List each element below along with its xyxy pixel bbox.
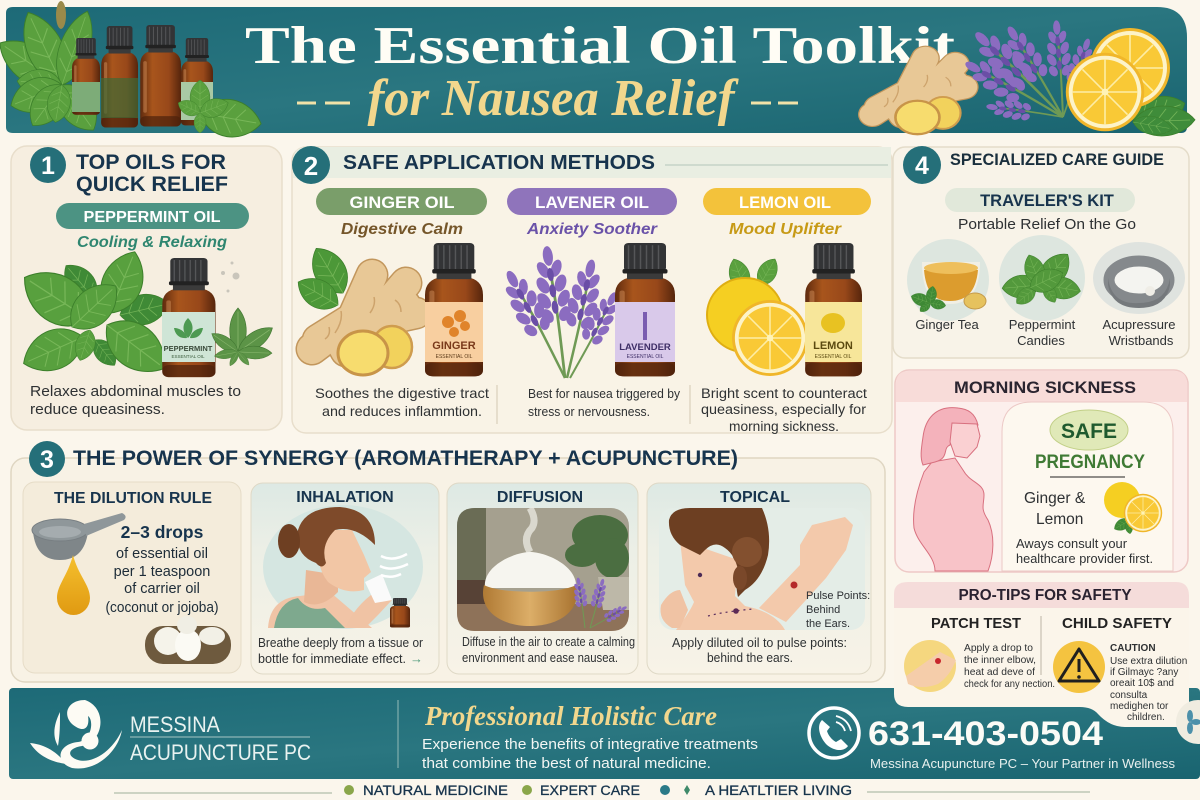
- text: CAUTION: [1110, 643, 1156, 654]
- tagline: Cooling & Relaxing: [77, 234, 227, 251]
- droplets: [221, 262, 240, 292]
- tag: a healthier living: A HEATLTIER LIVING: [705, 783, 852, 798]
- body text: [30, 384, 241, 418]
- card: topical: [647, 483, 871, 674]
- icon: oil drop: [57, 555, 90, 615]
- text: Use extra dilution: [1110, 656, 1187, 667]
- phone number: 631-403-0504: [868, 715, 1103, 753]
- pill: ginger: [316, 188, 487, 215]
- caption: Apply diluted oil to pulse points:: [672, 636, 847, 650]
- icon: measuring spoon: [32, 513, 126, 560]
- description: queasiness, especially for: [701, 402, 867, 417]
- tag: natural medicine: NATURAL MEDICINE: [363, 783, 508, 798]
- icon: lavender: [493, 244, 628, 386]
- callout: Pulse Points:: [806, 590, 870, 602]
- badge: safe: [1050, 410, 1128, 450]
- caption: [258, 636, 423, 666]
- description: [315, 385, 489, 419]
- care heading: Professional Holistic Care: [424, 701, 717, 731]
- icon: lemon bottle: [805, 243, 862, 376]
- text: [1110, 643, 1187, 723]
- item: acupressure wristbands: Wristbands: [1109, 333, 1174, 348]
- caption: Breathe deeply from a tissue or: [258, 636, 423, 650]
- badge: safe: SAFE: [1061, 420, 1117, 443]
- description: Bright scent to counteract: [701, 386, 867, 401]
- advisory: [1016, 536, 1153, 566]
- number badge 4: 4: [915, 152, 929, 180]
- caption: [462, 635, 635, 665]
- number badge 3: [29, 441, 65, 477]
- logo text: ACUPUNCTURE PC: [130, 740, 311, 765]
- icon: ginger bottle: GINGER: [432, 340, 476, 352]
- heading: TOP OILS FOR: [76, 151, 226, 174]
- caption: environment and ease nausea.: [462, 651, 618, 665]
- heading: PATCH TEST: [931, 615, 1021, 632]
- subtitle: for Nausea Relief: [368, 70, 739, 127]
- illustration: topical application: [659, 508, 865, 630]
- dosage text: of carrier oil: [124, 581, 200, 597]
- subheading: Portable Relief On the Go: [958, 217, 1136, 233]
- dosage text: 2–3 drops: [121, 522, 204, 542]
- dosage text: [106, 522, 218, 616]
- tag: a healthier living: [660, 783, 852, 798]
- heading: SPECIALIZED CARE GUIDE: [950, 151, 1164, 169]
- icon: essential oil bottles: [72, 25, 213, 127]
- panel: the power of synergy: [11, 441, 885, 682]
- footer band: [9, 688, 1200, 779]
- description: [528, 386, 680, 419]
- icon: phone: [809, 708, 859, 758]
- tagline: Digestive Calm: [341, 221, 463, 238]
- advisory: Aways consult your: [1016, 536, 1128, 551]
- column: patch test: [904, 615, 1055, 692]
- pill: peppermint oil: [56, 203, 249, 229]
- icon: lemon bottle: ESSENTIAL OIL: [815, 354, 852, 360]
- traveler's kit label: TRAVELER'S KIT: [980, 192, 1114, 210]
- body text: reduce queasiness.: [30, 402, 165, 418]
- panel: top oils for quick relief: [11, 146, 282, 430]
- icon: ginger: [291, 240, 416, 375]
- header banner: [0, 1, 1195, 142]
- advisory: healthcare provider first.: [1016, 551, 1153, 566]
- tagline: Mood Uplifter: [729, 221, 842, 238]
- pill: ginger: GINGER OIL: [350, 193, 454, 212]
- caption: Diffuse in the air to create a calming: [462, 635, 635, 649]
- logo text: MESSINA: [130, 712, 220, 737]
- body text: Relaxes abdominal muscles to: [30, 384, 241, 400]
- icon: warning: [1053, 641, 1105, 693]
- icon: coconut: [145, 616, 231, 664]
- heading: INHALATION: [296, 489, 394, 506]
- icon: peppermint bottle: ESSENTIAL OIL: [171, 354, 205, 359]
- number badge 4: [903, 146, 941, 184]
- tagline: Anxiety Soother: [526, 221, 658, 238]
- pill: lavender: [507, 188, 677, 215]
- logo text: [130, 712, 311, 765]
- card: diffusion: [447, 483, 638, 674]
- care text: Experience the benefits of integrative treatments: [422, 737, 758, 753]
- traveler's kit label: [945, 188, 1135, 212]
- icon: lavender bottle: [615, 243, 675, 376]
- icon: patch on arm: [904, 640, 956, 692]
- care text: [422, 737, 758, 772]
- heading: THE DILUTION RULE: [54, 490, 212, 507]
- text: the inner elbow,: [964, 654, 1036, 666]
- column: lavender oil: [493, 188, 680, 419]
- bottom tagline strip: [114, 783, 1090, 798]
- icon: lavender bottle: LAVENDER: [619, 342, 671, 353]
- logo mark: [30, 700, 122, 769]
- heading: CHILD SAFETY: [1062, 615, 1172, 632]
- card: inhalation: [251, 483, 439, 674]
- item: peppermint candies: Peppermint: [1009, 317, 1076, 332]
- text: if Gilmayc ?any: [1110, 667, 1178, 678]
- dosage text: of essential oil: [116, 546, 208, 562]
- pill: lavender: LAVENER OIL: [535, 193, 649, 212]
- text: oreait 10$ and: [1110, 678, 1174, 689]
- text: [964, 642, 1055, 690]
- pill: lemon: [703, 188, 871, 215]
- item: peppermint candies: [999, 235, 1085, 348]
- icon: lavender bottle: ESSENTIAL OIL: [627, 354, 664, 360]
- icon: peppermint bottle: PEPPERMINT: [164, 344, 213, 353]
- heading: PRO-TIPS FOR SAFETY: [958, 587, 1132, 604]
- description: [701, 386, 867, 434]
- heading: DIFFUSION: [497, 489, 583, 506]
- panel: safe application methods: [291, 146, 892, 434]
- description: Soothes the digestive tract: [315, 385, 489, 401]
- description: morning sickness.: [729, 419, 839, 434]
- text: medighen tor: [1110, 701, 1169, 712]
- icon: lemons: [707, 255, 808, 376]
- illustration: pregnant silhouette: [914, 408, 993, 571]
- icon: peppermint bottle: [162, 258, 216, 377]
- text: consulta: [1110, 690, 1148, 701]
- item: acupressure wristbands: Acupressure: [1103, 317, 1175, 332]
- dosage text: (coconut or jojoba): [106, 600, 218, 616]
- icon: ginger root header: [873, 58, 964, 134]
- caption: behind the ears.: [707, 651, 793, 665]
- caption: bottle for immediate effect.: [258, 652, 406, 666]
- text: ginger and lemon: Lemon: [1036, 511, 1083, 528]
- number badge 3: 3: [40, 446, 54, 474]
- text: children.: [1127, 712, 1165, 723]
- tag: expert care: EXPERT CARE: [540, 783, 640, 798]
- pill: lemon: LEMON OIL: [739, 193, 831, 212]
- text: ginger and lemon: [1024, 490, 1086, 528]
- heading: MORNING SICKNESS: [954, 378, 1136, 397]
- number badge 2: [292, 146, 330, 184]
- item: ginger tea: [907, 239, 989, 332]
- illustration: diffuser: [457, 508, 630, 633]
- callout: Behind: [806, 604, 840, 616]
- pill: peppermint oil: PEPPERMINT OIL: [84, 209, 221, 226]
- heading: QUICK RELIEF: [76, 173, 228, 196]
- item: acupressure wristbands: [1093, 242, 1185, 348]
- icon: small mint: [208, 308, 277, 367]
- text: ginger and lemon: Ginger &: [1024, 490, 1086, 507]
- title: The Essential Oil Toolkit: [245, 17, 955, 75]
- column: lemon oil: [701, 188, 871, 434]
- caption: [672, 636, 847, 665]
- partner text: Messina Acupuncture PC – Your Partner in Wellness: [870, 757, 1175, 771]
- icon: mint sprig on bottles: [175, 80, 264, 142]
- caption: →: [410, 651, 423, 666]
- text: Apply a drop to: [964, 642, 1033, 654]
- icon: ginger bottle: ESSENTIAL OIL: [436, 354, 473, 360]
- icon: lemon bottle: LEMON: [813, 340, 853, 352]
- heading: SAFE APPLICATION METHODS: [343, 151, 655, 174]
- description: Best for nausea triggered by: [528, 386, 680, 401]
- card: the dilution rule: [23, 482, 241, 673]
- heading: THE POWER OF SYNERGY (AROMATHERAPY + ACUPUNCTURE): [73, 447, 738, 470]
- panel: pro-tips for safety: [894, 582, 1200, 744]
- item: ginger tea: Ginger Tea: [915, 317, 979, 332]
- icon: lemons: [1104, 482, 1162, 534]
- callout: the Ears.: [806, 618, 850, 630]
- heading: [76, 151, 228, 196]
- panel: specialized care guide: [893, 146, 1189, 358]
- number badge 1: 1: [41, 152, 55, 180]
- safe pregnancy card: [1002, 402, 1173, 571]
- callout: [806, 590, 870, 630]
- care text: that combine the best of natural medicine.: [422, 756, 711, 772]
- heading: TOPICAL: [720, 489, 790, 506]
- illustration: woman inhaling: [263, 505, 423, 629]
- icon: flower seal: [1176, 700, 1200, 744]
- icon: ginger bottle: [425, 243, 483, 376]
- number badge 1: [30, 147, 66, 183]
- dosage text: per 1 teaspoon: [114, 564, 210, 580]
- text: heat ad deve of: [964, 666, 1035, 678]
- icon: mint leaves: [12, 244, 178, 386]
- label: PREGNANCY: [1035, 452, 1145, 473]
- column: ginger oil: [291, 188, 489, 419]
- icon: lavender header: [958, 19, 1100, 131]
- icon: mint leaves left: [0, 1, 107, 140]
- text: check for any nection.: [964, 678, 1055, 690]
- icon: lemons header: [1066, 28, 1195, 138]
- description: stress or nervousness.: [528, 404, 650, 419]
- item: peppermint candies: Candies: [1017, 333, 1065, 348]
- panel: morning sickness: [895, 370, 1188, 572]
- description: and reduces inflammtion.: [322, 403, 482, 419]
- number badge 2: 2: [304, 151, 318, 181]
- column: child safety: [1053, 615, 1187, 723]
